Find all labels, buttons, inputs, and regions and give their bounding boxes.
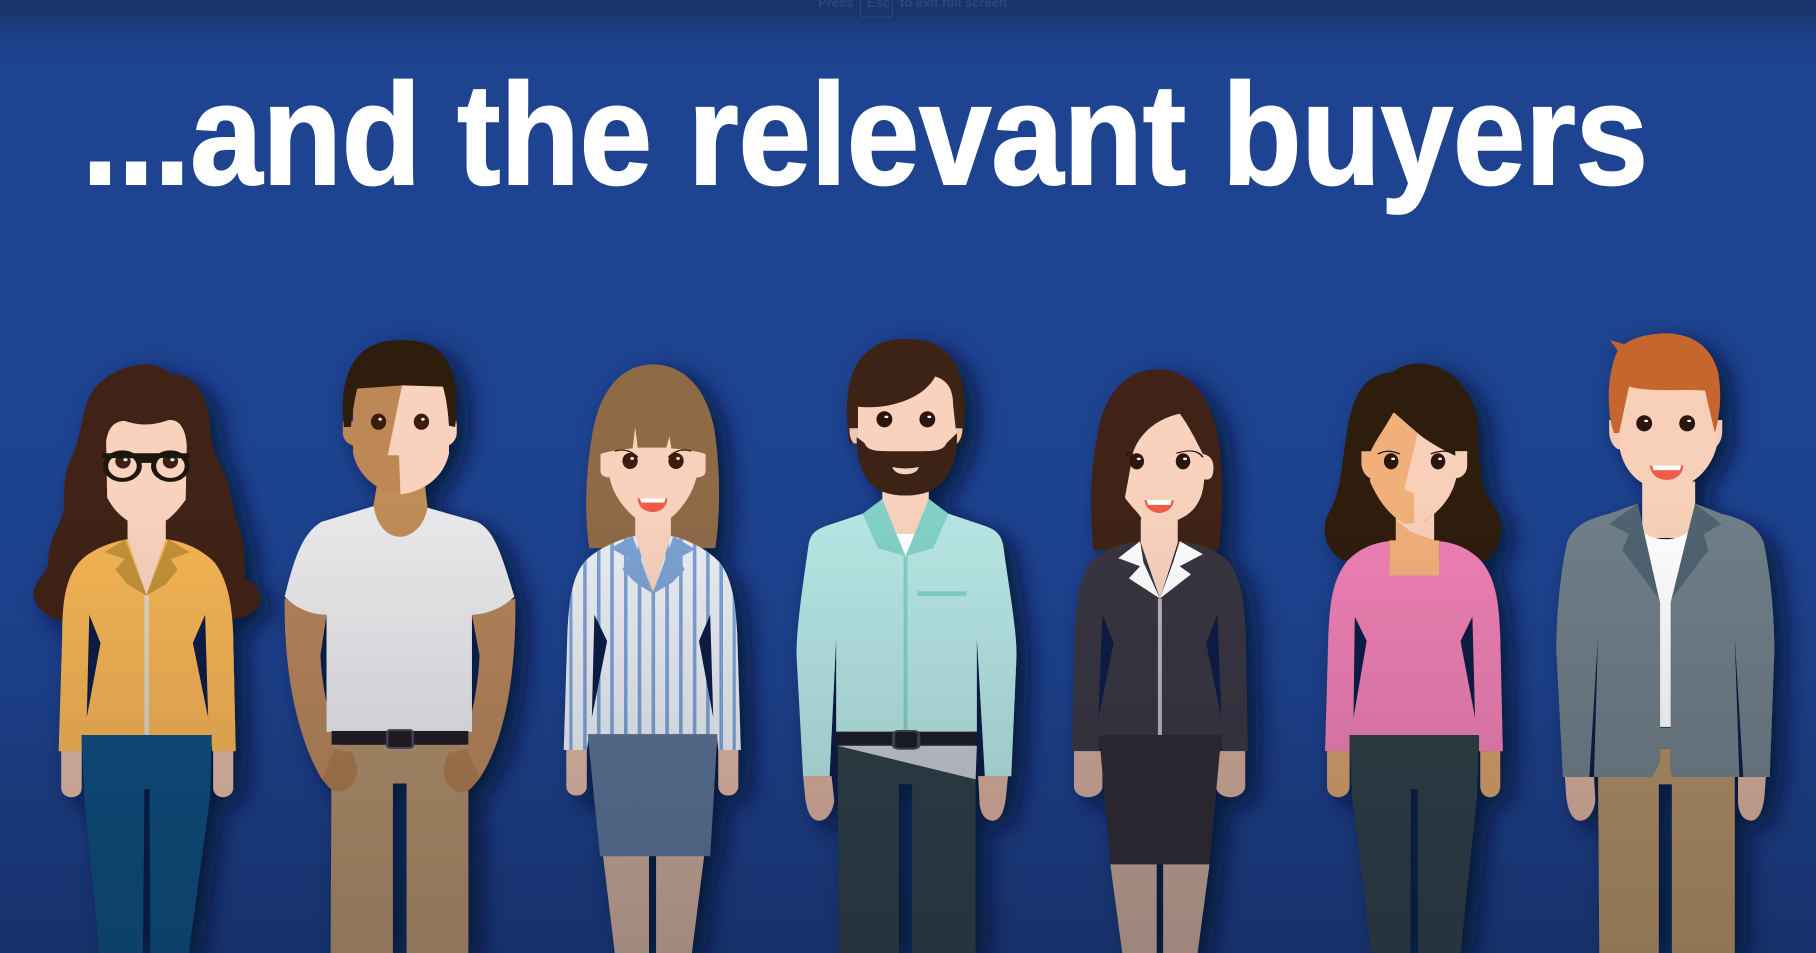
arm gaps <box>87 615 208 718</box>
arm gaps <box>592 615 713 718</box>
face <box>353 381 449 494</box>
face <box>106 420 187 595</box>
pink top <box>1325 541 1503 751</box>
ears <box>343 421 457 446</box>
eyes <box>876 411 935 427</box>
jacket <box>1072 541 1248 751</box>
mouth <box>892 467 919 474</box>
belt <box>836 731 977 749</box>
title: ...and the relevant buyers <box>82 54 1648 215</box>
face <box>1370 413 1459 524</box>
hair <box>1325 364 1501 560</box>
ears <box>1361 451 1467 478</box>
eyes <box>615 450 691 469</box>
arms <box>285 599 515 792</box>
fullscreen hint <box>818 0 1007 17</box>
ears <box>849 428 962 444</box>
blouse stripes <box>569 522 736 764</box>
person: bearded man in mint shirt <box>797 339 1017 953</box>
legs <box>603 856 704 953</box>
belt <box>332 730 468 748</box>
shirt <box>797 510 1017 776</box>
skirt <box>588 734 717 856</box>
person: woman in striped blouse <box>564 364 741 953</box>
arm gaps <box>1589 637 1743 777</box>
hands <box>1565 777 1766 821</box>
hair <box>1609 333 1720 433</box>
hair <box>343 340 457 427</box>
t-shirt <box>285 506 514 732</box>
legs <box>1110 864 1209 953</box>
jacket <box>1556 504 1774 777</box>
mouth <box>1650 465 1683 480</box>
person: red-haired man in grey blazer <box>1556 333 1774 953</box>
face <box>1616 377 1717 490</box>
skirt <box>1099 735 1221 864</box>
collar <box>863 499 948 556</box>
collar <box>105 539 190 595</box>
arm gaps <box>1098 615 1221 718</box>
eyes <box>1636 415 1695 431</box>
glasses and eyes <box>102 452 190 480</box>
face <box>601 427 706 592</box>
arm gaps <box>832 637 985 776</box>
person: woman in yellow jacket with glasses <box>34 364 261 953</box>
trousers <box>1598 748 1735 953</box>
person: woman in dark suit <box>1072 369 1248 953</box>
ears <box>1609 420 1722 449</box>
hands <box>322 749 480 792</box>
trousers <box>1350 735 1479 953</box>
hands <box>566 750 738 796</box>
tucked shirt fold <box>838 746 977 779</box>
hair <box>847 339 965 443</box>
hands <box>61 751 233 797</box>
hair <box>1091 369 1222 550</box>
white collar <box>1118 541 1203 599</box>
collar <box>611 536 695 594</box>
trousers <box>837 744 976 953</box>
neck <box>373 481 428 537</box>
person: man in white t-shirt <box>285 340 515 953</box>
hands <box>1074 751 1245 797</box>
mouth <box>1145 500 1174 513</box>
long wavy hair <box>34 364 261 621</box>
undershirt <box>896 534 917 556</box>
neck <box>1642 481 1695 538</box>
zip <box>1158 599 1162 735</box>
lapels <box>1609 504 1721 599</box>
zip <box>144 595 149 735</box>
eyes <box>1378 451 1455 469</box>
trousers <box>331 745 468 953</box>
neck <box>1396 514 1434 546</box>
eyes <box>371 414 429 430</box>
trousers <box>82 735 212 953</box>
face <box>1125 414 1213 599</box>
hands <box>803 776 1008 821</box>
hair <box>586 364 719 548</box>
white t-shirt <box>1641 530 1688 728</box>
beard <box>857 433 957 496</box>
person: woman in pink top <box>1325 364 1503 953</box>
placket and pocket <box>904 556 966 732</box>
neckline skin <box>1389 540 1439 576</box>
hands <box>1327 751 1500 797</box>
neck <box>882 490 929 556</box>
face <box>858 377 957 492</box>
eyes <box>1127 451 1203 469</box>
yellow jacket <box>59 539 236 751</box>
mouth <box>638 498 667 512</box>
blouse <box>564 536 741 750</box>
arm gaps <box>1353 617 1475 718</box>
belt <box>1660 727 1671 749</box>
